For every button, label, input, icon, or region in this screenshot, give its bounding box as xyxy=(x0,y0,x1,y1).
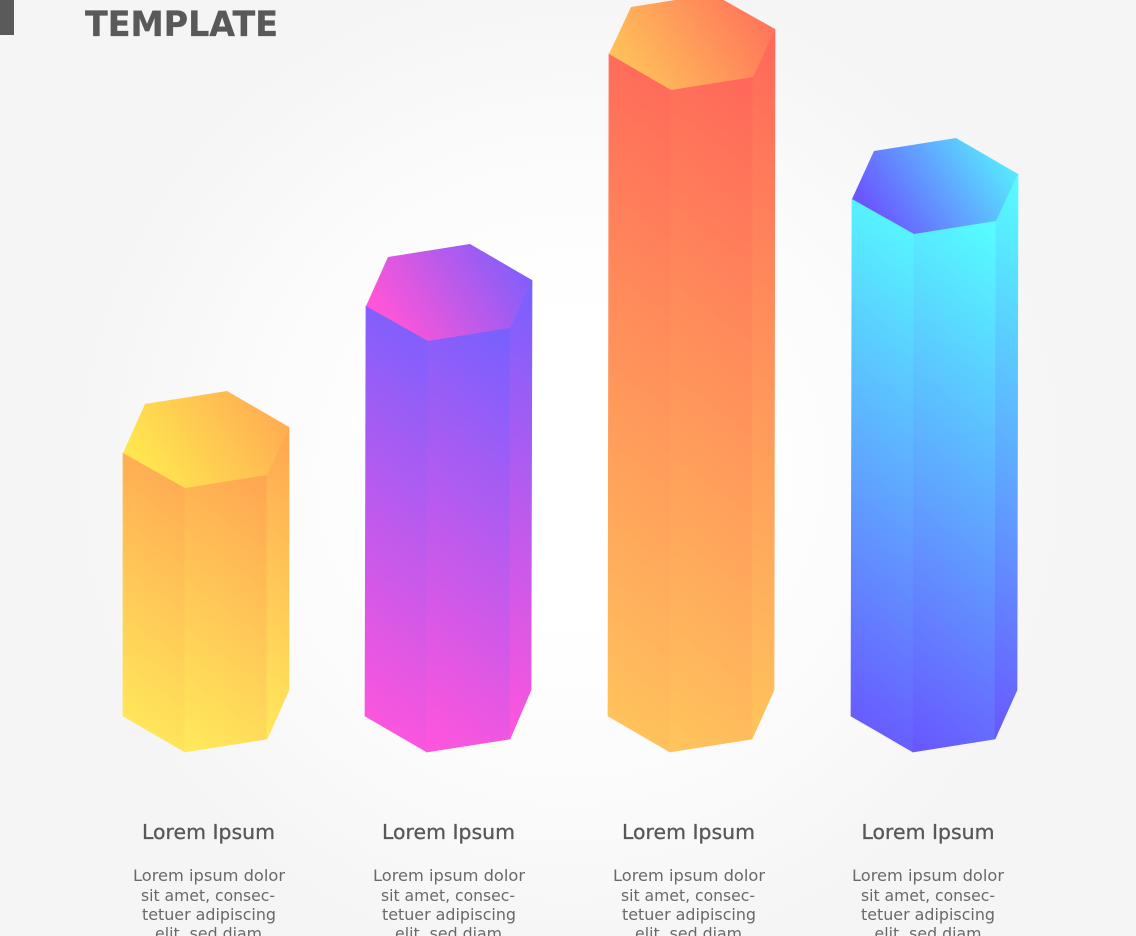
label column 2 xyxy=(373,820,525,936)
label column 4: Lorem ipsum dolor xyxy=(852,866,1004,885)
bar 3: red-orange hexagonal prism xyxy=(608,0,775,752)
label column 4: tetuer adipiscing xyxy=(861,905,995,924)
label column 1: Lorem ipsum dolor xyxy=(133,866,285,885)
label column 1 xyxy=(133,820,285,936)
label column 1: sit amet, consec- xyxy=(141,886,275,905)
bar 2: purple-pink hexagonal prism xyxy=(365,244,532,752)
label column 3: Lorem Ipsum xyxy=(622,820,755,844)
label column 2: Lorem ipsum dolor xyxy=(373,866,525,885)
title: TEMPLATE xyxy=(85,5,278,45)
label column 4: Lorem Ipsum xyxy=(862,820,994,844)
label column 4 xyxy=(852,820,1004,936)
bar 1: yellow-orange hexagonal prism xyxy=(123,391,289,752)
label column 2: sit amet, consec- xyxy=(381,886,515,905)
title accent block xyxy=(0,0,14,35)
label column 1: Lorem Ipsum xyxy=(142,820,275,844)
label column 3 xyxy=(613,820,765,936)
label column 3: tetuer adipiscing xyxy=(622,905,756,924)
label column 3: sit amet, consec- xyxy=(621,886,755,905)
bar 4: cyan-blue hexagonal prism xyxy=(851,138,1018,752)
label column 2: Lorem Ipsum xyxy=(382,820,515,844)
label column 3: Lorem ipsum dolor xyxy=(613,866,765,885)
label column 4: sit amet, consec- xyxy=(861,886,995,905)
label column 1: tetuer adipiscing xyxy=(142,905,276,924)
label column 2: tetuer adipiscing xyxy=(382,905,516,924)
